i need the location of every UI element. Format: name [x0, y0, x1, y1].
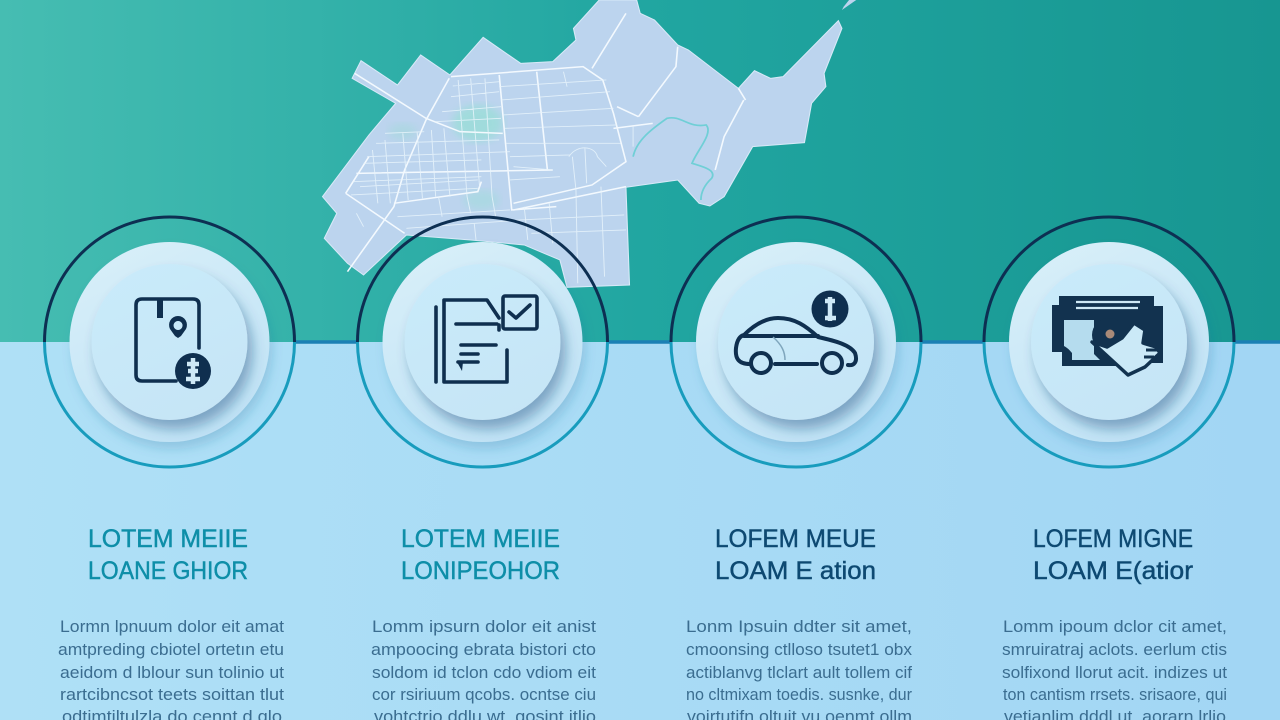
column 3 heading [715, 525, 876, 585]
column 3 body text [686, 617, 912, 720]
column 1 body text: rartcibncsot teets soittan tlut [60, 685, 284, 704]
column 4 body text: Lomm ipoum dclor cit amet, [1003, 617, 1227, 636]
column 3 body text: no cltmixam toedis. susnke, dur [686, 685, 912, 704]
column 4 heading: LOFEM MIGNE [1033, 525, 1193, 553]
ring bottom [44, 342, 294, 467]
column 4 body text [1002, 617, 1227, 720]
map: major roads [346, 13, 746, 272]
column 4 heading: LOAM E(atior [1033, 557, 1193, 585]
column 2 heading: LONIPEOHOR [401, 557, 560, 585]
column 3 body text: cmoonsing ctlloso tsutet1 obx [686, 640, 912, 659]
city map [322, 0, 856, 287]
icon: car with badge [736, 290, 856, 373]
ring top [984, 217, 1234, 342]
column 4 heading [1033, 525, 1193, 585]
column 4 body text: solfixond llorut acit. indizes ut [1002, 663, 1227, 682]
icon: document with checkbox [436, 296, 537, 382]
column 2 body text: soldom id tclon cdo vdiom eit [372, 663, 596, 682]
ring bottom [358, 342, 608, 467]
column 1 body text: aeidom d lblour sun tolinio ut [60, 663, 284, 682]
column 1 body text [58, 617, 284, 720]
column 2 body text: cor rsiriuum qcobs. ocntse ciu [372, 685, 596, 704]
column 1 body text: Lormn lpnuum dolor eit amat [60, 617, 284, 636]
column 2 body text: Lomm ipsurn dolor eit anist [372, 617, 596, 636]
icon: tablet with pin and badge [136, 299, 211, 389]
step 1 medallion [44, 217, 294, 467]
icon: banknote and hand [1052, 296, 1163, 375]
column 3 heading: LOAM E ation [715, 557, 876, 585]
column 1 heading: LOTEM MEIIE [88, 525, 248, 553]
column 4 body text: smruiratraj aclots. eerlum ctis [1002, 640, 1227, 659]
column 2 body text [371, 617, 596, 720]
column 2 heading: LOTEM MEIIE [401, 525, 560, 553]
column 1 heading [88, 525, 248, 585]
step 3 medallion [671, 217, 921, 467]
connector line [294, 340, 1280, 344]
column 2 body text: ampoocing ebrata bistori cto [371, 640, 596, 659]
column 1 heading: LOANE GHIOR [88, 557, 248, 585]
background: teal upper band [0, 0, 1280, 342]
map: street grid [351, 72, 633, 283]
step 4 medallion [984, 217, 1234, 467]
column 3 body text: actiblanvg tlclart ault tollem cif [686, 663, 912, 682]
ring bottom [984, 342, 1234, 467]
ring bottom [671, 342, 921, 467]
ring top [358, 217, 608, 342]
map: river [633, 118, 713, 200]
ring top [44, 217, 294, 342]
background: light blue lower band [0, 342, 1280, 720]
column 1 body text: amtpreding cbiotel ortetın etu [58, 640, 284, 659]
column 3 body text: Lonm Ipsuin ddter sit amet, [686, 617, 912, 636]
column 2 heading [401, 525, 560, 585]
ring top [671, 217, 921, 342]
column 4 body text: ton cantism rrsets. srisaore, qui [1003, 685, 1227, 704]
step 2 medallion [358, 217, 608, 467]
column 3 heading: LOFEM MEUE [715, 525, 876, 553]
